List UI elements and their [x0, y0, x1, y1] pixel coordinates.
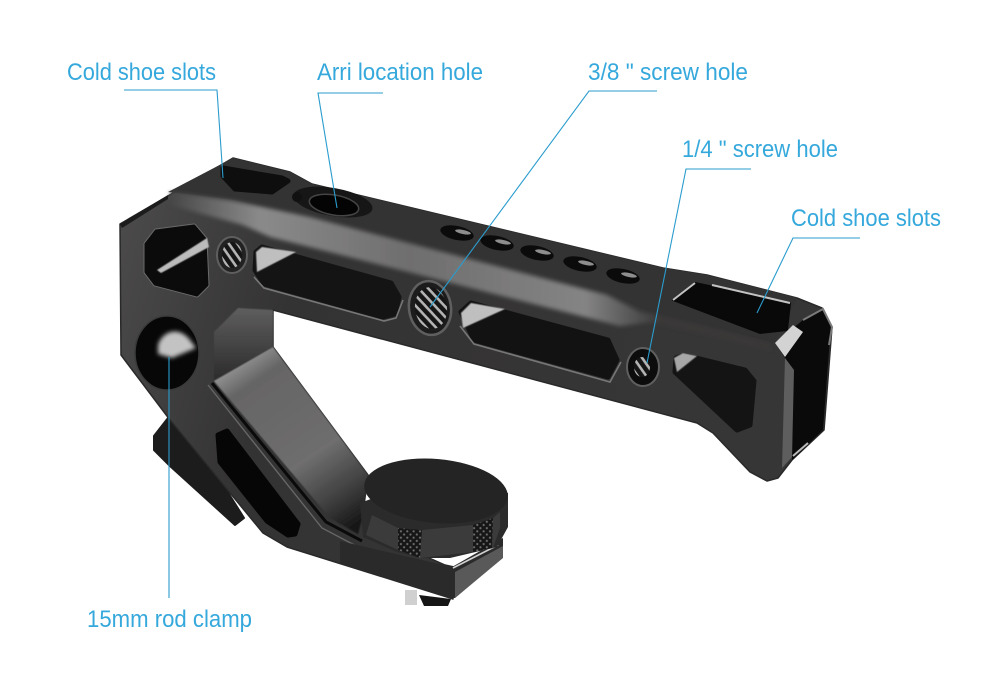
clamp foot plate: [340, 538, 503, 598]
label: cold shoe slots right: Cold shoe slots: [791, 205, 941, 232]
knob side: [360, 470, 508, 558]
reflection in right slot: [461, 303, 505, 328]
arm upper inner surface: [214, 308, 273, 380]
3/8 inch threaded hole: [405, 278, 455, 338]
label: 1/4 screw hole: 1/4 " screw hole: [682, 136, 838, 163]
reflection in rod hole: [158, 332, 196, 358]
slanted edge of the head face: [120, 195, 168, 228]
label: cold shoe slots left: Cold shoe slots: [67, 59, 216, 86]
highlights in top screw holes: [455, 228, 637, 279]
arm: [208, 308, 368, 549]
thumb knob: [360, 453, 511, 558]
1/4 inch threaded hole: [627, 348, 659, 386]
reflection in hexagonal window: [157, 238, 209, 273]
top rim: [803, 309, 832, 345]
infographic: top handle diagram: [68, 62, 940, 632]
triangular window: [675, 355, 754, 430]
handle body: [120, 158, 832, 599]
end strip: [782, 358, 794, 468]
long slot, right: [461, 303, 617, 377]
top surface: [168, 158, 797, 343]
plate highlight: [453, 545, 498, 568]
bottom screw: [405, 590, 451, 606]
hexagonal window: [146, 226, 209, 295]
label: 15mm rod clamp: 15mm rod clamp: [87, 606, 252, 633]
lower rim of left slot: [254, 277, 403, 321]
arm angled surface: [214, 347, 368, 534]
small threaded hole, left: [217, 237, 247, 273]
label: 3/8 screw hole: 3/8 " screw hole: [588, 59, 748, 86]
bright ridge band: [170, 192, 772, 350]
long slot, left: [255, 247, 399, 317]
knob facet highlight: [366, 512, 500, 558]
knob top: [361, 453, 511, 529]
knob knurling right: [473, 518, 493, 552]
reflection in triangular window: [674, 353, 697, 372]
main frame outline: [120, 158, 832, 599]
arri location hole: [291, 181, 375, 223]
bottom lip highlight: [793, 443, 808, 456]
top cold shoe slot, left: [223, 168, 288, 192]
plate side face: [455, 546, 503, 598]
lower rim of right slot: [460, 326, 621, 382]
knob knurling left: [398, 528, 422, 558]
row of top screw holes: [439, 223, 641, 286]
bright rim of slot: [673, 283, 790, 303]
arm slot: [218, 431, 298, 535]
end face with open channel: [775, 309, 832, 468]
arm lower edge lines: [212, 383, 362, 541]
rear lever of rod clamp: [154, 418, 244, 525]
label: arri location hole: Arri location hole: [317, 59, 483, 86]
reflection in left slot: [256, 247, 296, 272]
top cold shoe slot, right: [673, 283, 790, 333]
leader lines: [124, 90, 860, 598]
bright diagonal inside channel: [775, 325, 803, 357]
15mm rod hole: [135, 316, 199, 390]
